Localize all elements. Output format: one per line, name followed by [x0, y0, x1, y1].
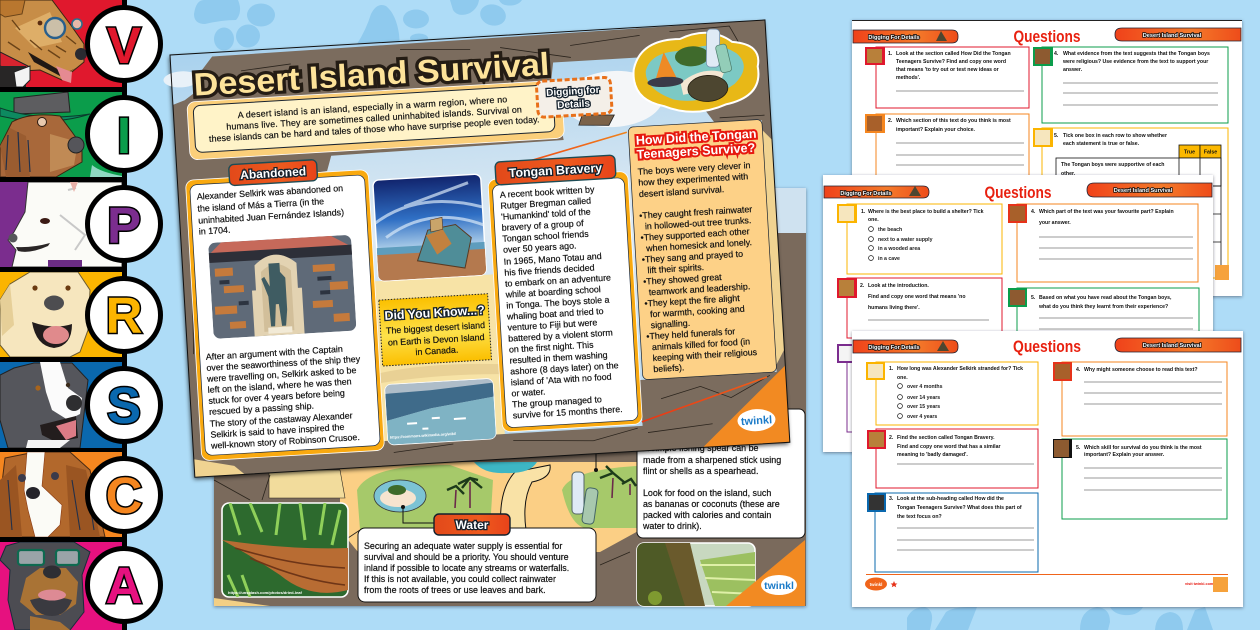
left tab	[824, 186, 929, 198]
letter S: S	[107, 377, 141, 434]
left tab: Digging For Details	[868, 35, 920, 41]
panel: Tongan Bravery: whaling boat and tried to	[506, 306, 604, 322]
panel: Water text: survival and should be a priority. You should venture	[364, 552, 569, 562]
question 2: 2.	[889, 435, 894, 441]
question 1: one.	[868, 217, 879, 223]
question 4: answer.	[1063, 67, 1083, 73]
question 3: Tongan Teenagers Survive? What does this part of	[897, 505, 1022, 511]
panel: How Did the Tongan Teenagers Survive: •They supported each other	[640, 226, 750, 243]
sand column	[374, 274, 505, 449]
panel: How Did the Tongan Teenagers Survive: signalling.	[650, 318, 690, 330]
panel: Abandoned: over the seaworthiness of the ship they	[206, 354, 361, 373]
panel: Tongan Bravery: island of 'Ata with no food	[511, 372, 612, 388]
heading: Tongan Bravery: Tongan Bravery	[508, 161, 603, 180]
panel: Tongan Bravery: ashore (8 days later) on the	[510, 360, 619, 377]
panel: How Did the Tongan Teenagers Survive: lift their spirits.	[647, 262, 704, 275]
question 2: Look at the introduction.	[868, 283, 929, 289]
question 2	[837, 278, 1002, 338]
panel: introduction	[187, 80, 565, 160]
left tab: Digging For Details	[840, 191, 892, 197]
question 2	[865, 114, 1029, 194]
question 4: What evidence from the text suggests that the Tongan boys	[1063, 51, 1210, 57]
rock frame	[170, 20, 790, 477]
panel: spear and food text: water to drink).	[642, 521, 702, 531]
accent lines	[522, 125, 769, 428]
worksheet 3	[852, 331, 1243, 607]
corner tab and twinkl logo	[698, 365, 790, 447]
panel: Tongan Bravery: venture to Fiji but were	[507, 317, 598, 333]
right tab: Desert Island Survival	[1143, 33, 1202, 39]
panel: How Did the Tongan Teenagers Survive: How Did the Tongan	[635, 127, 757, 148]
question 5: Based on what you have read about the Tongan boys,	[1039, 295, 1172, 301]
poster outline	[170, 20, 790, 477]
panel: How Did the Tongan Teenagers Survive: •They sang and prayed to	[642, 249, 743, 265]
right tab: Desert Island Survival	[1114, 188, 1173, 194]
heading: Questions	[1013, 337, 1081, 356]
question 4: Why might someone choose to read this text?	[1084, 367, 1198, 373]
panel: Tongan Bravery: 'Humankind' told of the	[501, 207, 591, 222]
letter A	[88, 548, 160, 622]
question 2: important? Explain your choice.	[896, 127, 976, 133]
question 3: Look at the sub-heading called How did the	[897, 496, 1004, 502]
panel: Tongan Bravery: over 50 years ago.	[503, 240, 577, 255]
photo: dried leaf: https://unsplash.com/photos/dried-leaf	[228, 590, 302, 595]
panel: Water text: from the roots of trees or use leaves and bark.	[364, 585, 546, 595]
question 1: over 14 years	[907, 395, 940, 401]
question 5: Which skill for survival do you think is the most	[1084, 445, 1202, 451]
question 1: one.	[897, 375, 908, 381]
heading: Water: Water	[456, 518, 489, 532]
question 3	[867, 493, 1038, 572]
letter C: C	[106, 467, 142, 524]
heading: Water	[434, 514, 510, 535]
letter I	[88, 98, 160, 170]
question 5: The Tongan boys were supportive of each	[1061, 162, 1164, 168]
question 1: Teenagers Survive? Find and copy one word	[896, 59, 1006, 65]
question 5: 5.	[1031, 295, 1036, 301]
panel: Tongan Bravery: Tongan school friends	[502, 229, 589, 244]
question 5: each statement is true or false.	[1063, 141, 1140, 147]
badge: Digging for Details: Details	[557, 98, 591, 111]
island map icon	[374, 480, 426, 512]
left tab	[853, 340, 958, 353]
panel: Water text	[358, 528, 596, 602]
question 2: Find the section called Tongan Bravery.	[897, 435, 995, 441]
question 5	[1008, 288, 1199, 348]
question 1: the beach	[878, 227, 902, 233]
question 2: Which section of this text do you think is most	[896, 118, 1011, 124]
panel: Abandoned: well-known story of Robinson Crusoe.	[210, 432, 360, 451]
back poster: water page	[214, 188, 806, 606]
panel: spear and food text: Look for food on the island, such	[643, 488, 771, 498]
letter R	[88, 278, 160, 352]
letter I: I	[117, 107, 131, 164]
corner tab and logo	[726, 540, 805, 606]
panel: How Did the Tongan Teenagers Survive: teamwork and leadership.	[648, 281, 751, 297]
question 1: over 4 months	[907, 384, 943, 390]
footer: twinkl	[870, 582, 882, 587]
band: green	[0, 92, 122, 177]
panel: spear and food text: as bananas or coconuts (these are	[643, 499, 780, 509]
photo: coconut palm	[637, 543, 755, 606]
letter V: V	[107, 17, 141, 74]
question 1	[837, 204, 1002, 274]
question 2: meaning to 'badly damaged'.	[897, 452, 968, 458]
right tab	[1087, 183, 1212, 197]
question 1: in a cave	[878, 256, 900, 262]
band: red	[0, 0, 122, 87]
letter V	[88, 8, 160, 80]
letter P: P	[107, 197, 141, 254]
panel: Abandoned: Alexander Selkirk was abandoned on	[196, 183, 343, 202]
panel: Tongan Bravery: Rutger Bregman called	[500, 196, 591, 211]
badge: island survival icons	[631, 26, 761, 115]
panel: Abandoned: The story of the castaway Alexander	[209, 410, 353, 429]
question 1	[866, 362, 1038, 425]
panel: Tongan Bravery: in Tonga. The boys stole a	[506, 295, 610, 311]
left tab	[853, 30, 958, 43]
panel: Water text: inland if possible to locate any streams or waterfalls.	[364, 563, 569, 573]
panel: Tongan Bravery: battered by a violent storm	[508, 327, 613, 344]
heading: Questions	[1014, 27, 1080, 46]
question 2: humans living there'.	[868, 305, 920, 311]
question 1: Look at the section called How Did the Tongan	[896, 51, 1011, 57]
panel: Water text: If this is not available, you could collect rainwater	[364, 574, 556, 584]
panel: Abandoned: the island of Más a Tierra (in the	[197, 196, 324, 214]
question 1: in a wooded area	[878, 246, 920, 252]
panel: Tongan Bravery: In 1965, Mano Totau and	[503, 251, 602, 267]
panel: Abandoned: After an argument with the Captain	[206, 344, 343, 362]
letter A: A	[106, 557, 142, 614]
letter R: R	[106, 287, 142, 344]
corner tab and twinkl logo: twinkl	[741, 414, 772, 428]
right tab	[1115, 28, 1241, 41]
panel: spear and food text: flint or shells as a spearhead.	[643, 466, 758, 476]
panel: How Did the Tongan Teenagers Survive: when homesick and lonely.	[645, 237, 752, 253]
band: blue	[0, 362, 122, 448]
panel: Abandoned	[185, 170, 385, 461]
question 4	[1033, 47, 1228, 123]
panel: Tongan Bravery: or water.	[511, 387, 546, 399]
panel: spear and food text: A simple fishing spear can be	[643, 443, 759, 453]
panel: How Did the Tongan Teenagers Survive: •They showed great	[643, 272, 722, 287]
photo: Selkirk statue	[208, 235, 357, 339]
question 5: other.	[1061, 171, 1076, 177]
sidebar black rails	[0, 0, 127, 630]
left tab: Digging For Details	[868, 345, 920, 351]
question 5: Tick one box in each row to show whether	[1063, 133, 1167, 139]
question 1	[865, 47, 1029, 108]
question 4: 4.	[1076, 367, 1081, 373]
band: purple	[0, 182, 122, 267]
question 4	[1008, 204, 1198, 282]
panel: introduction: A desert island is an island, especially in a warm region, where no	[237, 94, 508, 120]
question 2: Find and copy one word that means 'no	[868, 294, 966, 300]
question 5: 5.	[1054, 133, 1059, 139]
badge: Digging for Details: Digging for	[546, 85, 600, 99]
panel: Tongan Bravery: A recent book written by	[499, 184, 595, 200]
panel: spear and food text: made from a sharpened stick using	[643, 455, 781, 465]
panel: introduction: humans live. They are sometimes called uninhabited islands. Survival on	[226, 104, 522, 132]
panel: Tongan Bravery: bravery of a group of	[501, 218, 584, 233]
question 4: Which part of the text was your favourite part? Explain	[1039, 209, 1174, 215]
corner tab and logo: twinkl	[764, 580, 794, 592]
panel: How Did the Tongan Teenagers Survive: •They caught fresh rainwater	[639, 204, 753, 221]
question 5: what do you think they learnt from their experience?	[1038, 304, 1168, 310]
worksheet 1	[852, 20, 1242, 296]
panel: Tongan Bravery: on the first night. This	[509, 340, 594, 355]
footer	[865, 574, 1228, 592]
question 2: 2.	[860, 283, 865, 289]
question 4	[1053, 362, 1227, 436]
question 2: 2.	[888, 118, 893, 124]
letter C	[88, 458, 160, 532]
panel: introduction: these islands can be hard and tales of those who have surprise people even today.	[209, 114, 540, 144]
panel: How Did the Tongan Teenagers Survive: The boys were very clever in	[637, 160, 751, 177]
panel: Abandoned: Selkirk is said to have inspired the	[210, 422, 345, 440]
panel: Abandoned: were travelling on, Selkirk asked to be	[206, 365, 357, 384]
panel: spear and food text	[637, 409, 805, 538]
panel: How Did the Tongan Teenagers Survive: Teenagers Survive?	[636, 141, 756, 162]
question 5	[1033, 128, 1228, 278]
main poster	[162, 20, 790, 478]
photo: Devon Island ice: https://commons.wikimedia.org/wiki/	[390, 432, 457, 440]
band: pink	[0, 542, 122, 630]
sand and land	[340, 462, 640, 552]
icon: palm trees	[447, 478, 482, 508]
question 4: 4.	[1054, 51, 1059, 57]
panel: Tongan Bravery: survive for 15 months there.	[512, 404, 623, 420]
question 1: methods'.	[896, 75, 921, 81]
question 1: 1.	[861, 209, 866, 215]
panel: How Did the Tongan Teenagers Survive: keeping with their religious	[652, 347, 758, 363]
panel: Tongan Bravery: resulted in them washing	[509, 350, 608, 366]
photo: dried leaf	[222, 503, 348, 597]
right tab	[1115, 338, 1241, 352]
panel: Abandoned: left on the island, where he was then	[207, 376, 352, 395]
panel: How Did the Tongan Teenagers Survive: animals killed for food (in	[652, 336, 750, 352]
heading: Tongan Bravery	[495, 155, 616, 185]
VIPERS sidebar	[0, 0, 160, 630]
question 5: 5.	[1076, 445, 1081, 451]
letter S	[88, 368, 160, 442]
question 1: next to a water supply	[878, 237, 933, 243]
question 1: that means 'to try out or test new ideas or	[896, 67, 999, 73]
heading: Abandoned	[229, 160, 318, 186]
question 3	[837, 344, 1002, 432]
question 1: over 15 years	[907, 404, 940, 410]
connector lines	[403, 452, 596, 523]
worksheet 2	[823, 175, 1213, 452]
question 2	[867, 429, 1038, 488]
panel: How Did the Tongan Teenagers Survive: desert island survival.	[639, 184, 724, 199]
band: yellow	[0, 272, 122, 357]
question 4: were religious? Use evidence from the text to support your	[1062, 59, 1208, 65]
panel: Water text: Securing an adequate water supply is essential for	[364, 541, 562, 551]
panel: Tongan Bravery: to embark on an adventure	[505, 272, 611, 289]
poster background sky	[170, 20, 790, 477]
panel: How Did the Tongan Teenagers Survive: beliefs).	[653, 362, 685, 374]
photo: Devon Island ice	[385, 379, 496, 445]
callout: Did You Know	[379, 294, 491, 366]
question 5	[1053, 439, 1227, 519]
panel: How Did the Tongan Teenagers Survive: how they experimented with	[638, 171, 748, 188]
icon: water bottles	[572, 472, 598, 525]
panel: spear and food text: packed with calories and contain	[643, 510, 771, 520]
badge: Digging for Details	[536, 77, 615, 129]
question 2: Find and copy one word that has a similar	[897, 444, 1000, 450]
question 1: over 4 years	[907, 414, 937, 420]
panel: Tongan Bravery: The group managed to	[512, 394, 602, 409]
footer: visit twinkl.com	[1185, 582, 1214, 586]
question 5: True	[1184, 150, 1195, 156]
panel: Tongan Bravery: while at boarding school	[504, 284, 601, 300]
question 3: the text focus on?	[897, 514, 942, 520]
photo: shipwreck	[373, 174, 486, 281]
panel: Abandoned: in 1704.	[199, 225, 231, 237]
panel: Tongan Bravery	[488, 171, 643, 432]
panel: How Did the Tongan Teenagers Survive: in hollowed-out tree trunks.	[645, 215, 752, 231]
question 5: important? Explain your answer.	[1084, 452, 1165, 458]
callout: Did You Know: Did You Know...?	[384, 303, 485, 323]
panel: How Did the Tongan Teenagers Survive: •They held funerals for	[646, 326, 736, 341]
question 4: 4.	[1031, 209, 1036, 215]
band: orange	[0, 452, 122, 537]
panel: Tongan Bravery: his five friends decided	[504, 262, 595, 278]
question 5: False	[1204, 150, 1217, 156]
question 1: 1.	[888, 51, 893, 57]
question 1: 1.	[889, 366, 894, 372]
question 3: 3.	[889, 496, 894, 502]
panel: Abandoned: rescued by a passing ship.	[209, 401, 314, 417]
heading: Abandoned: Abandoned	[240, 164, 306, 182]
question 1: Where is the best place to build a shelter? Tick	[868, 209, 984, 215]
question 1: How long was Alexander Selkirk stranded for? Tick	[897, 366, 1023, 372]
panel: How Did the Tongan Teenagers Survive: for warmth, cooking and	[650, 304, 745, 319]
right tab: Desert Island Survival	[1143, 343, 1202, 349]
callout: Did You Know: on Earth is Devon Island	[388, 332, 485, 348]
heading: Questions	[984, 183, 1052, 202]
callout: Did You Know: The biggest desert island	[386, 320, 485, 336]
panel: Abandoned: uninhabited Juan Fernández Islands)	[198, 207, 344, 226]
panel: How Did the Tongan Teenagers Survive: •They kept the fire alight	[644, 293, 740, 309]
footer logo	[1215, 265, 1229, 280]
panel: Abandoned: stuck for over 4 years before being	[208, 388, 345, 406]
callout: Did You Know: in Canada.	[415, 345, 459, 357]
title: Desert Island Survival	[193, 46, 550, 103]
letter P	[88, 188, 160, 260]
question 4: your answer.	[1039, 220, 1071, 226]
icon: palm trees right	[600, 466, 636, 498]
panel: How Did the Tongan Teenagers Survive	[628, 119, 777, 380]
